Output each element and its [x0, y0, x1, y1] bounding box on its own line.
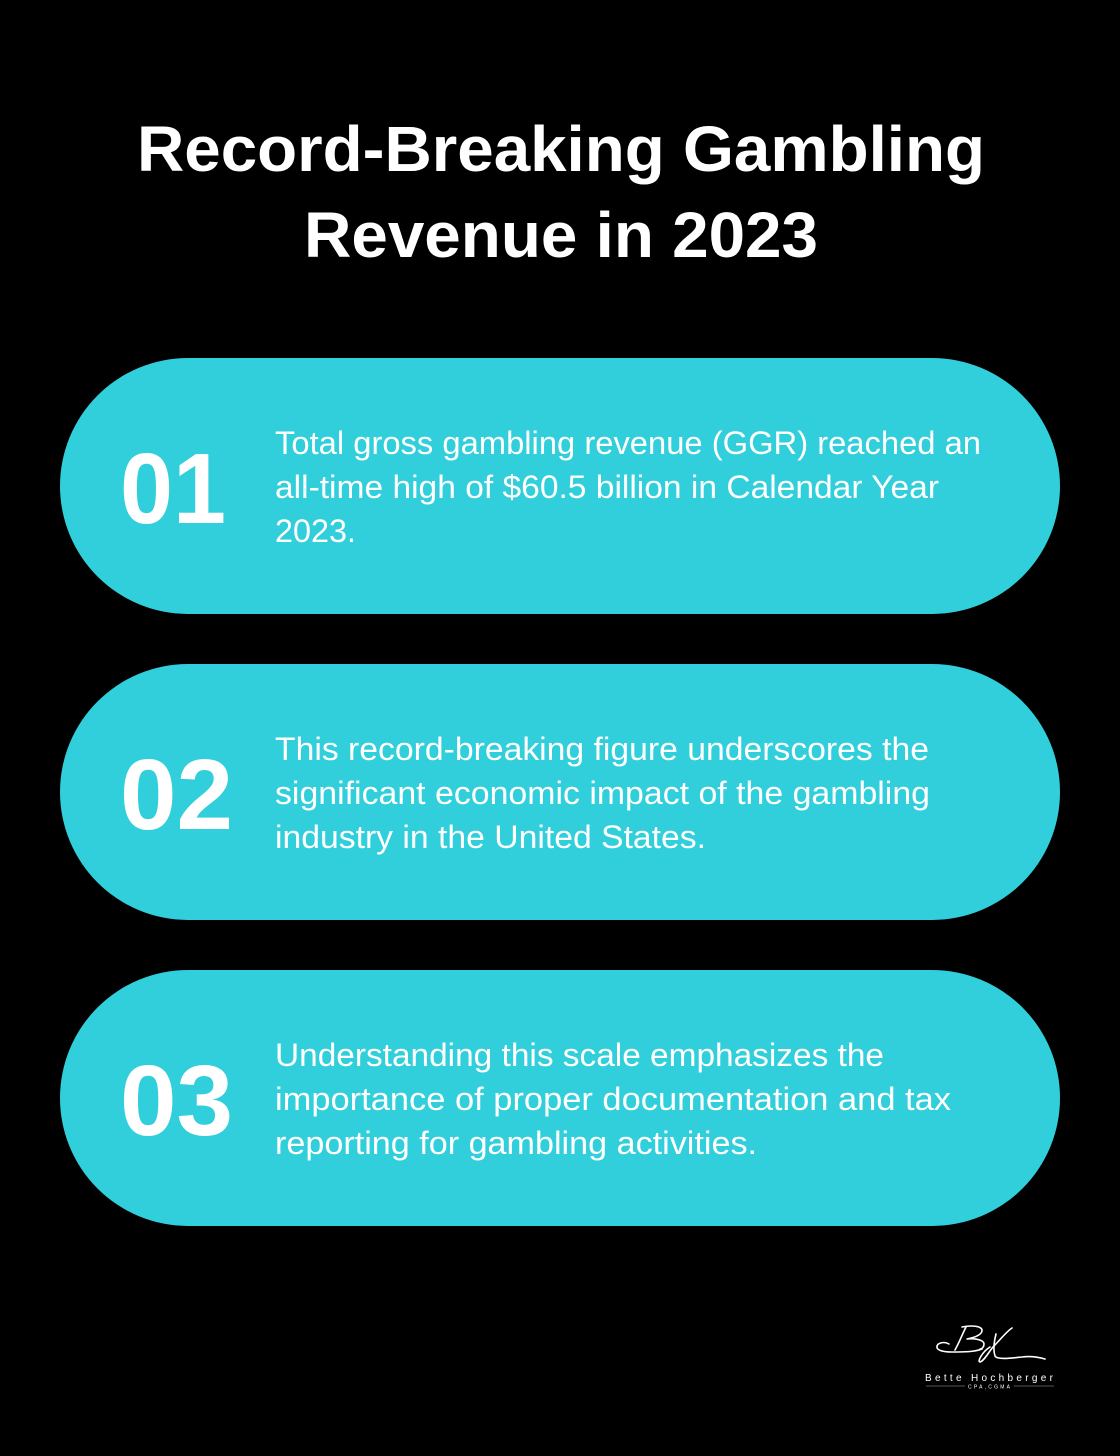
- text block 03: reporting for gambling activities.: [275, 1125, 757, 1161]
- text block 01: 2023.: [275, 513, 356, 549]
- text block 02: This record-breaking figure underscores the: [275, 731, 929, 767]
- panel: step 03: [60, 970, 1060, 1226]
- logo: Bette Hochberger: [925, 1326, 1054, 1390]
- title: Record-Breaking Gambling: [137, 113, 985, 185]
- pill background 02: [60, 664, 1060, 920]
- text block 02: significant economic impact of the gambling: [275, 775, 930, 811]
- credential rules: [926, 1385, 1054, 1387]
- number 01: 01: [120, 433, 226, 545]
- text block 01: Total gross gambling revenue (GGR) reached an: [275, 425, 981, 461]
- number 02: 02: [120, 739, 233, 851]
- panel: step 02: [60, 664, 1060, 920]
- pill background 03: [60, 970, 1060, 1226]
- title: [137, 113, 985, 271]
- text block 03: importance of proper documentation and tax: [275, 1081, 951, 1117]
- text block 03: [275, 1037, 951, 1161]
- text block 03: Understanding this scale emphasizes the: [275, 1037, 884, 1073]
- text block 01: [275, 425, 981, 549]
- pill background 01: [60, 358, 1060, 614]
- text block 02: [275, 731, 930, 855]
- icon: signature monogram: [937, 1326, 1045, 1362]
- title: Revenue in 2023: [304, 199, 818, 271]
- number 03: 03: [120, 1045, 233, 1157]
- brand name: Bette Hochberger: [925, 1373, 1054, 1384]
- panel: step 01: [60, 358, 1060, 614]
- brand credentials: CPA,CGMA: [968, 1384, 1011, 1390]
- text block 02: industry in the United States.: [275, 819, 706, 855]
- text block 01: all-time high of $60.5 billion in Calendar Year: [275, 469, 939, 505]
